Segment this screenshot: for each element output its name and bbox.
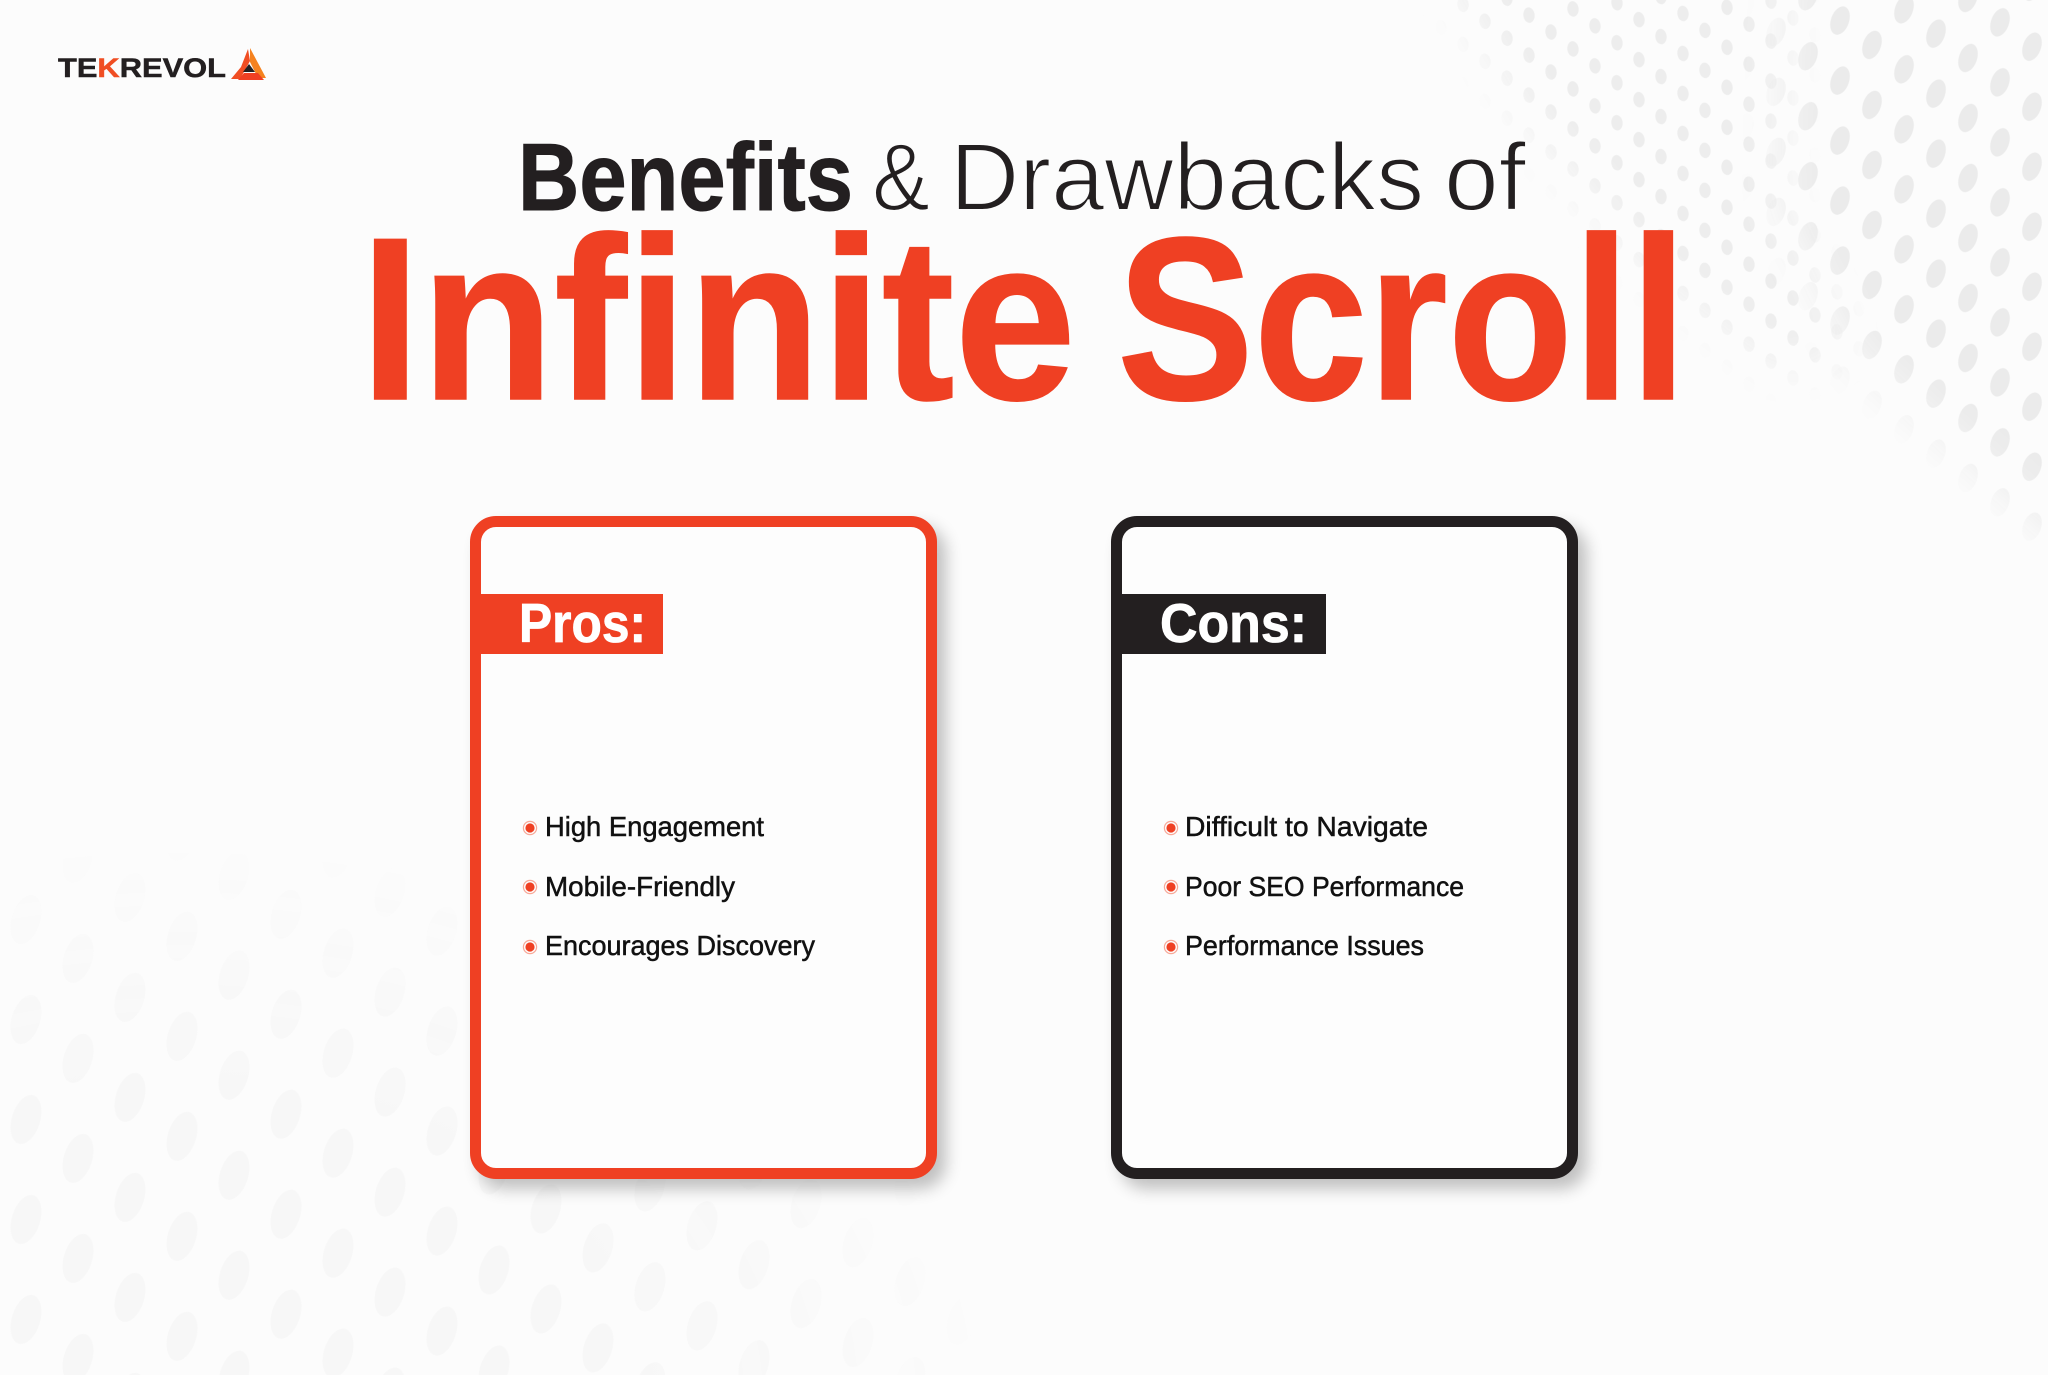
- title line: Benefits & Drawbacks of: of: [1444, 124, 1526, 231]
- panel: pros: [470, 516, 954, 1198]
- pros item: Encourages Discovery: Encourages Discovery: [545, 930, 815, 961]
- pros heading: Pros:: [519, 592, 646, 654]
- cons card frame: [1111, 516, 1578, 1179]
- title line: Infinite Scroll: [360, 190, 1687, 449]
- cons item: Poor SEO Performance: Poor SEO Performance: [1185, 871, 1464, 902]
- cons heading tab: [1122, 594, 1326, 654]
- pros card frame: [470, 516, 937, 1179]
- cons heading: Cons:: [1160, 592, 1307, 654]
- cons item: Performance Issues: Performance Issues: [1185, 930, 1424, 961]
- panel: cons: [1111, 516, 1596, 1198]
- logo icon: triangle: [231, 48, 266, 80]
- logo: TekRevol: [58, 48, 266, 82]
- cons content: [1160, 592, 1464, 961]
- pros item: Mobile-Friendly: Mobile-Friendly: [545, 871, 735, 902]
- pros item: High Engagement: High Engagement: [545, 811, 764, 842]
- title line: Benefits & Drawbacks of: [518, 124, 1526, 231]
- title line: Benefits & Drawbacks of: &: [872, 124, 930, 231]
- title: [360, 124, 1687, 420]
- title line: Benefits & Drawbacks of: Benefits: [518, 124, 853, 231]
- pros heading tab: [481, 594, 663, 654]
- pros content: [519, 592, 816, 962]
- title line: Benefits & Drawbacks of: Drawbacks: [950, 124, 1424, 231]
- cons item: Difficult to Navigate: Difficult to Navigate: [1185, 811, 1428, 842]
